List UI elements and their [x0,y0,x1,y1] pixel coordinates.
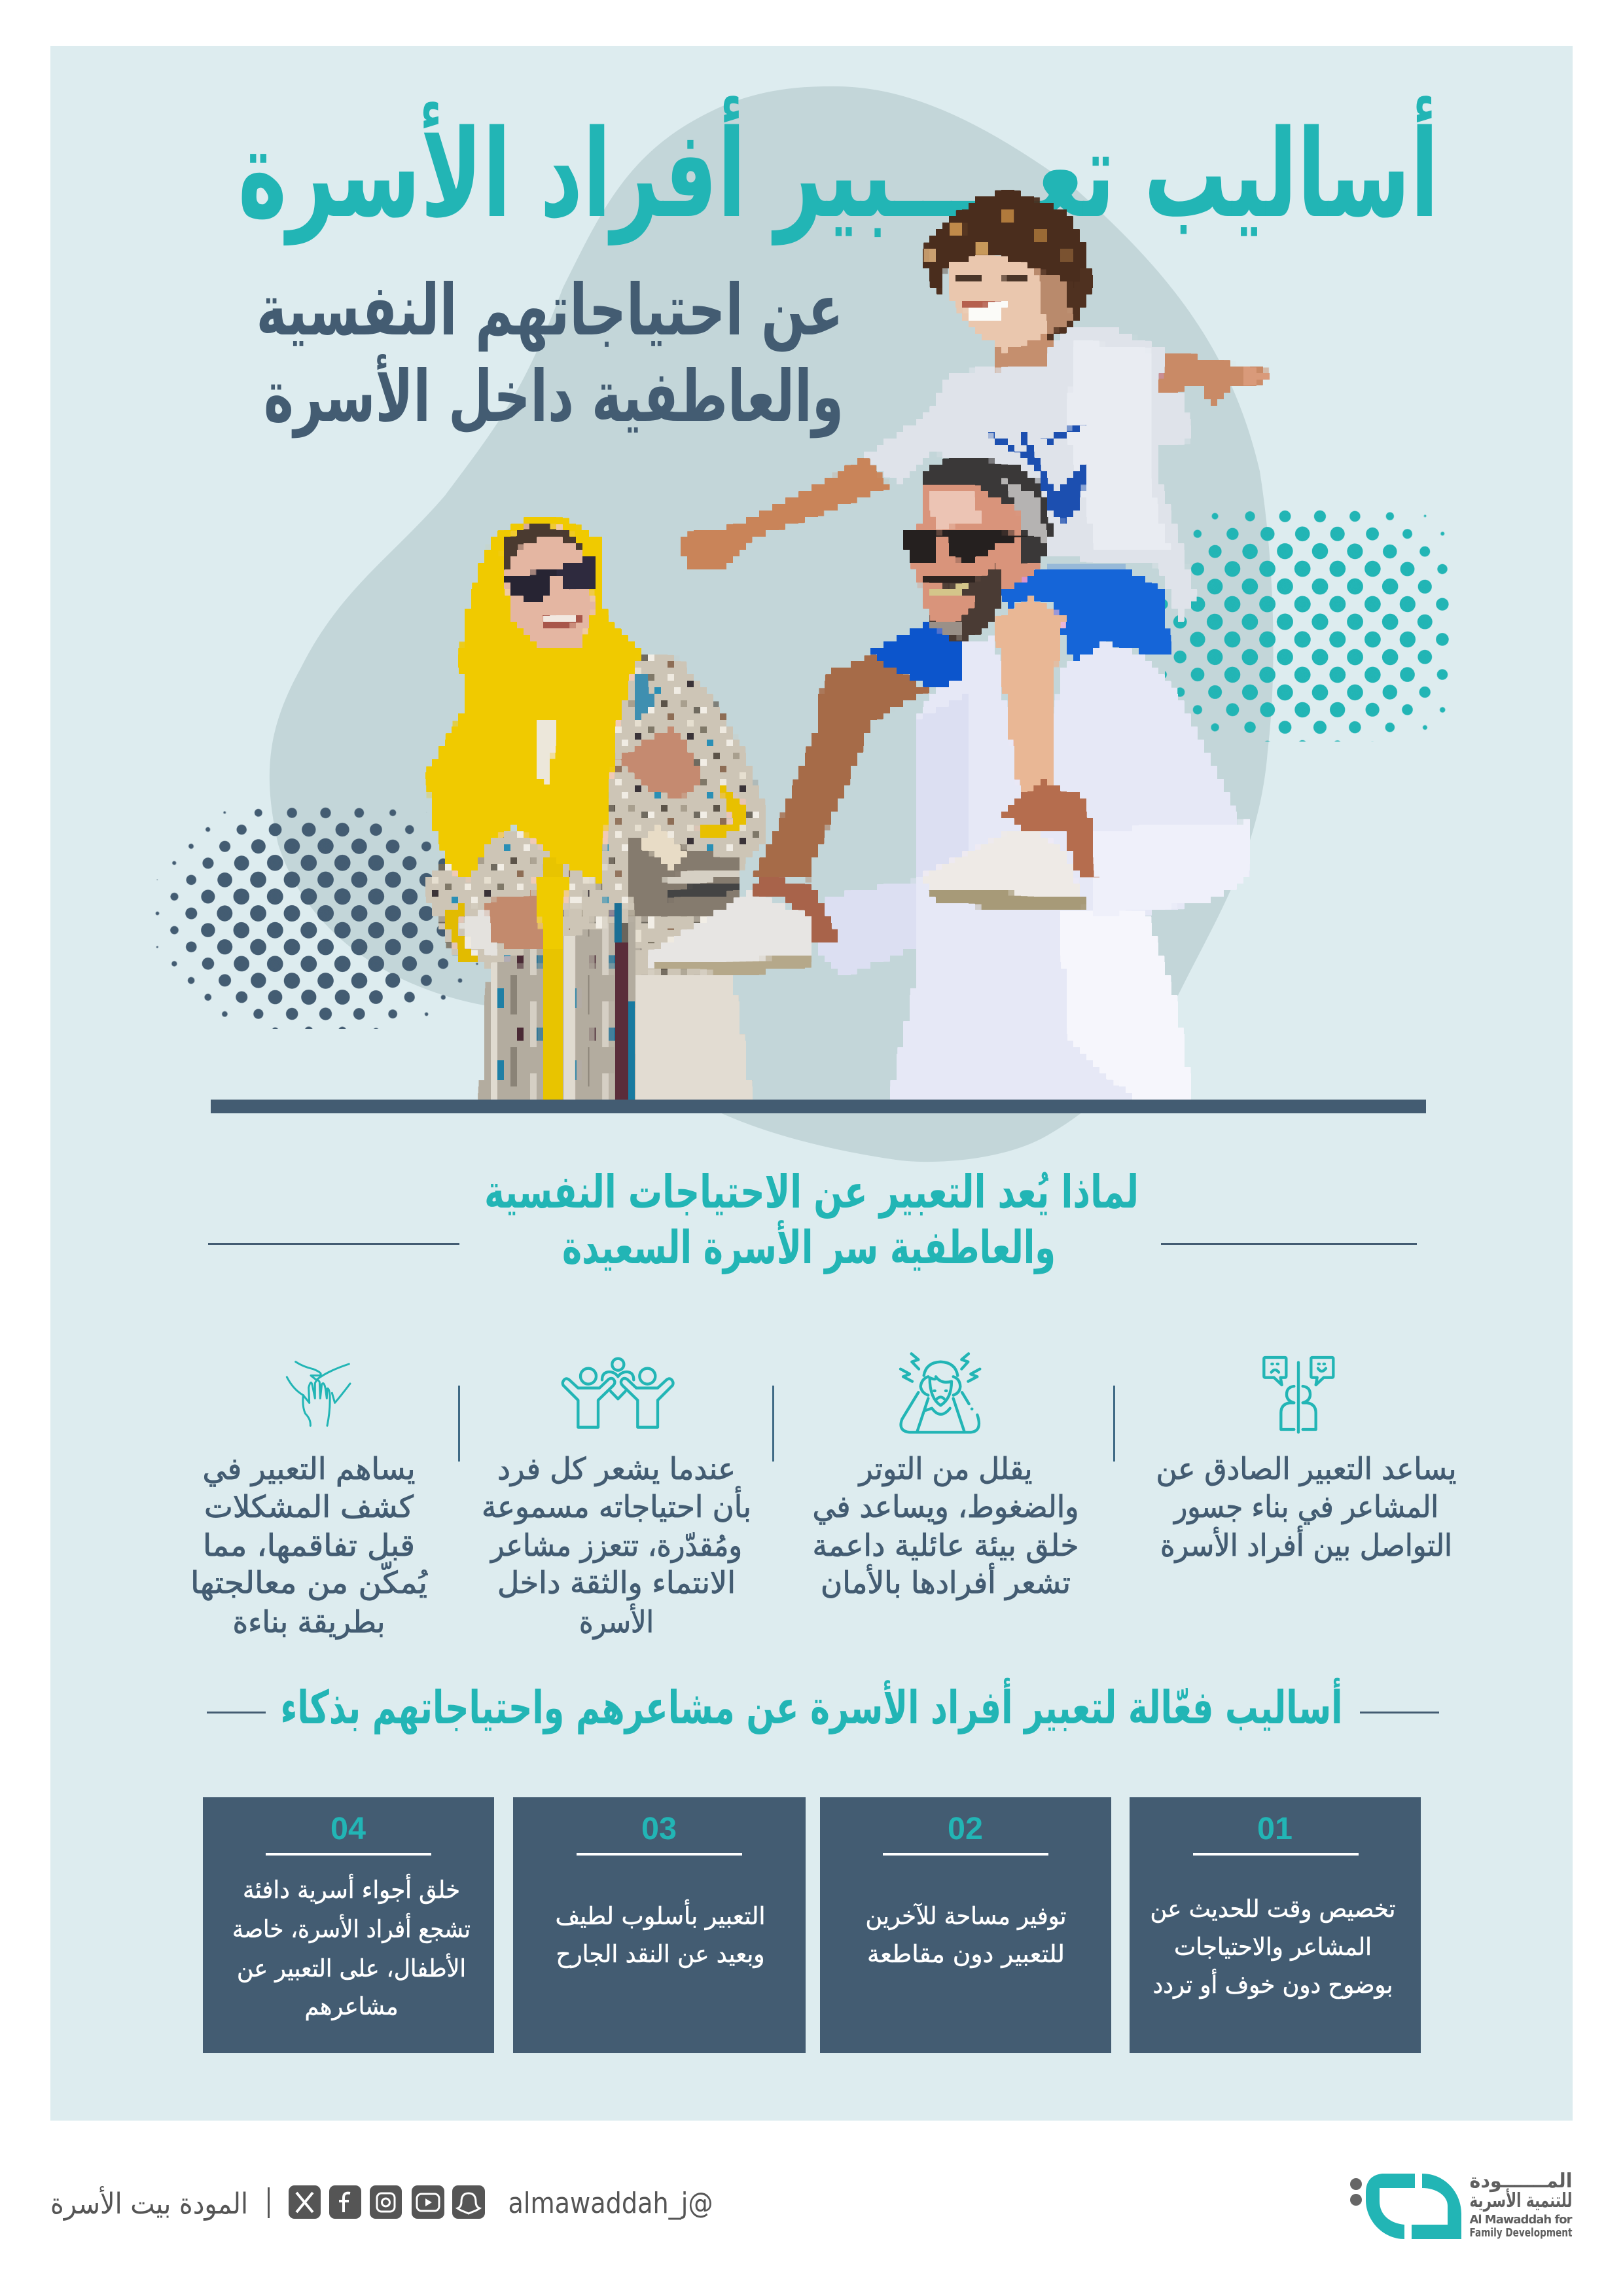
section heading: why: لماذا يُعد التعبير عن الاحتياجات النفسية [484,1165,1139,1219]
subtitle [257,270,844,439]
card 02: للتعبير دون مقاطعة [867,1940,1065,1968]
icon: three people together [563,1359,673,1427]
text: column 3: الأسرة [579,1603,654,1640]
card 03: 03 [641,1812,677,1846]
subtitle: والعاطفية داخل الأسرة [264,354,844,439]
decorative blob behind photo [270,86,1274,1162]
logo: المـــــــودة [1470,2170,1572,2193]
boy upper body [678,190,1273,621]
card 03: التعبير بأسلوب لطيف [555,1899,766,1930]
text: column 3 [482,1451,751,1640]
social icons [289,2185,485,2219]
card 04 [203,1797,494,2053]
text: column 2: تشعر أفرادها بالأمان [821,1563,1071,1601]
logo [1350,2170,1573,2240]
card 01: المشاعر والاحتياجات [1174,1933,1372,1961]
text: column 4 [190,1451,428,1640]
footer: slogan: المودة بيت الأسرة [50,2185,248,2221]
text: column 4: بطريقة بناءة [233,1604,385,1640]
text: column 1: المشاعر في بناء جسور [1173,1489,1438,1525]
text: column 3: بأن احتياجاته مسموعة [482,1486,751,1525]
text: column 4: كشف المشكلات [204,1489,414,1524]
card 04: خلق أجواء أسرية دافئة [243,1874,460,1904]
text: column 3: ومُقدّرة، تتعزز مشاعر [490,1528,742,1564]
text: column 4: يُمكّن من معالجتها [190,1561,428,1601]
text: column 2: والضغوط، ويساعد في [813,1489,1079,1525]
card 03 [513,1797,806,2053]
card 02: 02 [948,1812,983,1846]
halftone dots: teal [1165,511,1449,742]
card 04: الأطفال، على التعبير عن [237,1953,466,1982]
card 02 [820,1797,1111,2053]
text: column 2 [813,1451,1079,1601]
card 01: 01 [1257,1812,1293,1846]
card 04: تشجع أفراد الأسرة، خاصة [232,1913,471,1943]
man [732,458,1252,1099]
photo: family (woman, man and boy on his shoulders) [422,190,1273,1099]
woman [422,516,767,1099]
icon: stressed person [901,1354,980,1432]
card 01: بوضوح دون خوف أو تردد [1153,1969,1393,1999]
text: column 3: عندما يشعر كل فرد [497,1451,736,1487]
section heading: why: والعاطفية سر الأسرة السعيدة [562,1220,1056,1274]
text: column 1: يساعد التعبير الصادق عن [1156,1451,1457,1487]
logo: Family Development [1470,2226,1573,2240]
card 04: مشاعرهم [305,1992,398,2020]
halftone dots: navy [155,808,478,1029]
column dividers [458,1386,1115,1462]
text: column 1: التواصل بين أفراد الأسرة [1160,1526,1452,1564]
subtitle: عن احتياجاتهم النفسية [257,270,843,352]
text: column 3: الانتماء والثقة داخل [497,1565,736,1601]
text: column 2: خلق بيئة عائلية داعمة [813,1528,1079,1564]
bar under photo [211,1100,1426,1113]
text: column 1 [1156,1451,1457,1564]
icon: holding hands [287,1362,350,1426]
boy lower body [647,567,1170,975]
logo: للتنمية الأسرية [1470,2188,1572,2212]
card 02: توفير مساحة للآخرين [865,1902,1067,1930]
footer: separator [268,2187,270,2218]
card 04: 04 [330,1812,366,1846]
section heading: why [208,1165,1417,1274]
icon: two faces talking [1264,1357,1333,1432]
card 01: تخصيص وقت للحديث عن [1150,1895,1395,1923]
footer: handle: almawaddah_j@ [508,2187,713,2220]
card 01 [1130,1797,1421,2053]
text: column 2: يقلل من التوتر [858,1451,1033,1487]
text: column 4: قبل تفاقمها، مما [203,1528,415,1563]
card 03: وبعيد عن النقد الجارح [556,1940,764,1968]
text: column 4: يساهم التعبير في [203,1451,415,1487]
logo: Al Mawaddah for [1470,2213,1573,2227]
